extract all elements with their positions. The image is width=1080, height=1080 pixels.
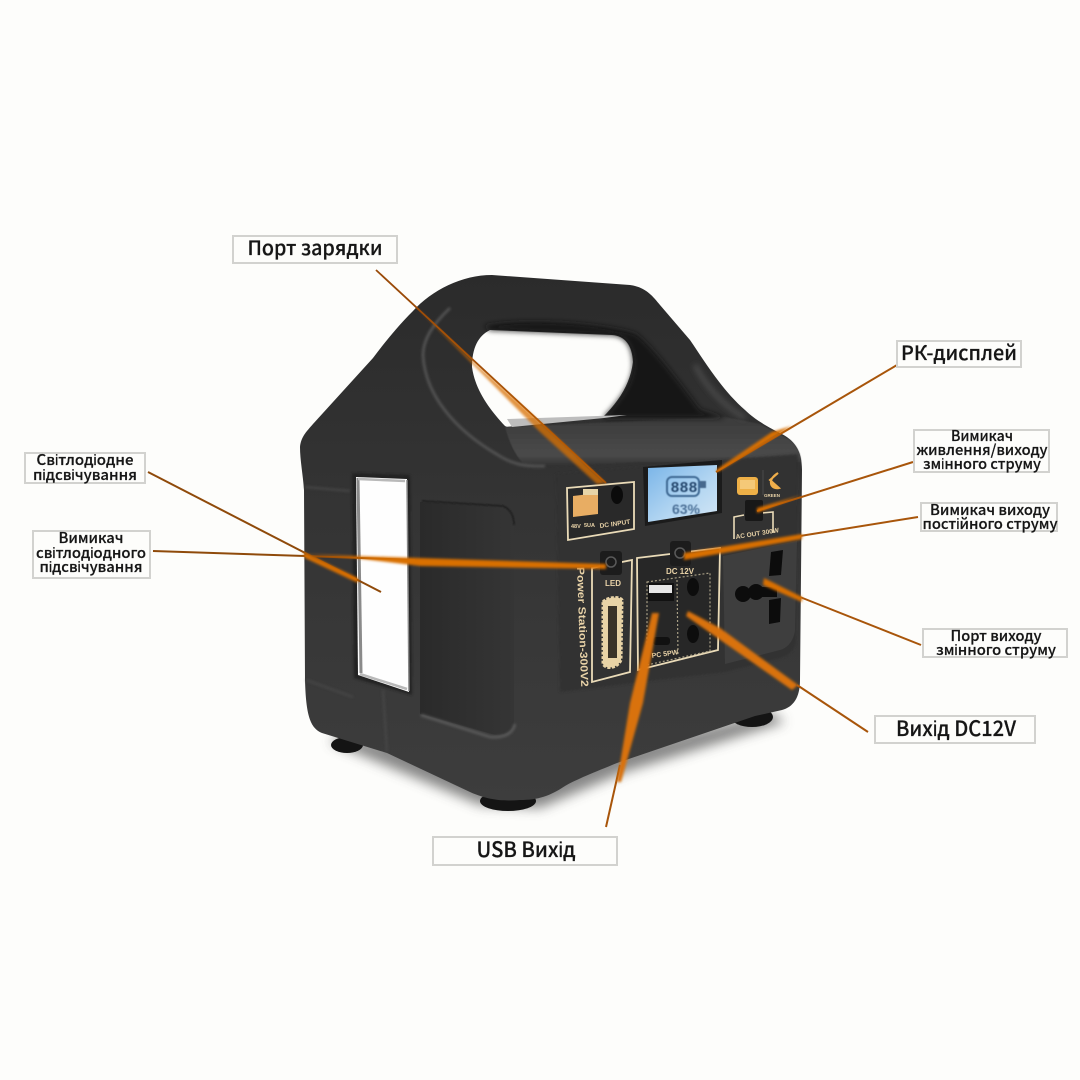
side panel bottom edge [421,715,515,737]
DC output panel: PC 5PW [651,649,679,660]
AC switch section [734,470,780,541]
line: AC switch [757,462,913,513]
label: USB output: USB Вихід [476,834,576,864]
line: DC12V output [686,611,868,732]
LCD display: 888 [670,480,698,497]
LCD display: 63% [672,501,701,517]
AC switch section: GREEN [764,493,780,498]
LED switch and Power Station panel [574,551,632,687]
callout lines [148,270,921,827]
AC output socket [723,541,797,664]
light strip below the handle opening [507,415,627,427]
LCD display [643,460,722,526]
label: charging port: Порт зарядки [248,232,382,261]
side panel recess [420,502,514,735]
LED lamp panel [352,473,412,695]
label: AC power switch: змінного струму [923,453,1041,474]
label: AC power switch: живлення/виходу [916,439,1048,460]
side panel dark edge [414,498,420,716]
label: LED lighting [25,449,145,485]
DC output panel [637,541,720,670]
label: AC output port [923,625,1067,660]
label: LED lighting switch: Вимикач [58,527,124,548]
charging port panel: 48V [571,524,581,530]
charging port panel [567,482,634,540]
label: USB output [433,834,617,865]
label: LED lighting: підсвічування [33,464,137,485]
label: AC power switch [914,425,1049,474]
front control recess [556,454,798,692]
label: LCD display: РК-дисплей [901,337,1017,366]
line: DC switch [684,517,918,560]
label: DC12V output: Вихід DC12V [896,713,1016,743]
label: AC power switch: Вимикач [951,425,1013,446]
top lip below the handle opening [505,417,801,468]
label: AC output port: змінного струму [936,639,1056,660]
handle dark inner shading [484,322,726,418]
line: LCD display [716,365,897,472]
rubber feet [331,707,773,811]
AC switch section: AC OUT 300W [735,527,780,541]
line: LED lighting [148,472,381,592]
label: AC output port: Порт виходу [950,625,1042,646]
label: LED lighting switch: підсвічування [40,556,142,577]
ground shadow [330,712,785,808]
charging port panel: 5UA [584,523,595,529]
line: AC output port [763,578,921,645]
side seams [305,487,387,752]
line: USB output [606,613,659,827]
label: LED lighting: Світлодіодне [36,449,134,470]
LED switch and Power Station panel: LED [605,579,621,588]
label: LED lighting switch [33,527,150,578]
handle right sheen [695,365,745,418]
label: DC output switch [921,499,1058,534]
side panel top edge [422,501,514,525]
DC output panel: DC 12V [666,567,695,576]
label: DC output switch: постійного струму [922,513,1058,534]
main body with handle [300,275,802,800]
handle front rim highlight [423,308,545,466]
charging port panel: DC INPUT [599,519,631,530]
LED switch and Power Station panel: Power Station-300V2 [574,567,590,687]
line: charging port [376,270,606,484]
power station device [300,275,802,811]
label: LED lighting switch: світлодіодного [36,542,146,563]
label: DC output switch: Вимикач виходу [930,499,1050,520]
line: LED switch [153,551,606,569]
